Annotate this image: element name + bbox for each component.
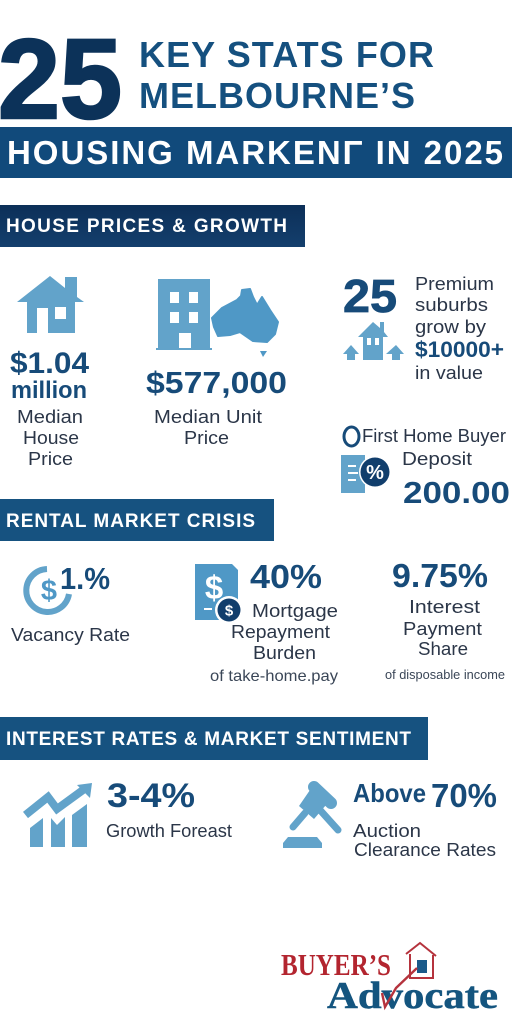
label: auction clearance rates: Auction (353, 821, 421, 841)
stat: mortgage repayment burden (195, 558, 338, 685)
icon: document with percent (341, 455, 391, 493)
value: 1.%: 1.% (60, 561, 110, 596)
label: mortgage repayment burden: Burden (253, 643, 316, 663)
logo: Buyer's Advocate (281, 943, 498, 1017)
value: above 70%: Above (353, 778, 426, 808)
value: $1.04 million: million (11, 377, 87, 404)
section heading: rental market crisis (0, 499, 274, 541)
logo wordmark: Advocate: Advocate (327, 975, 498, 1017)
title banner: HOUSING MARKENΓ IN 2025 (7, 134, 503, 171)
label: premium suburbs grow by: suburbs (415, 295, 488, 315)
label: vacancy rate: Vacancy Rate (11, 625, 130, 645)
label: premium suburbs grow by (415, 274, 504, 383)
label: auction clearance rates: Clearance Rates (354, 840, 496, 860)
icon: apartment building (156, 279, 212, 350)
value: $577,000: $577,000 (146, 365, 287, 400)
icon: map of Australia (212, 289, 278, 342)
title line: Melbourne's: MELBOURNE’S (139, 75, 415, 116)
value: 200.00: 200.00 (403, 475, 510, 510)
icon: document with percent: % (366, 462, 384, 484)
icon: dollar ring: $ (41, 575, 57, 607)
label: growth foreast: Growth Foreast (106, 821, 232, 841)
icon: dollar document (195, 564, 243, 624)
value: $1.04 million: $1.04 (10, 347, 89, 380)
label: interest payment share: Share (418, 639, 468, 659)
icon: house with growth arrows (343, 322, 404, 360)
value: $1.04 million (10, 347, 89, 404)
label: median unit price (154, 407, 262, 448)
label: interest payment share: Payment (403, 619, 482, 639)
stat: first home buyer deposit (341, 426, 510, 510)
label: first home buyer deposit (362, 426, 506, 469)
label: median house price (17, 407, 83, 469)
value: 9.75%: 9.75% (392, 557, 488, 594)
stat: vacancy rate (11, 561, 130, 645)
label: median house price: Median (17, 407, 83, 427)
title number 25: 25 (0, 16, 122, 142)
title line: key stats for: KEY STATS FOR (139, 34, 434, 75)
icon: house (17, 276, 84, 333)
stat: median house price (10, 276, 89, 469)
label: interest payment share: Interest (409, 597, 480, 617)
label: premium suburbs grow by: Premium (415, 274, 494, 294)
label: first home buyer deposit: First Home Buyer (362, 426, 506, 446)
stat: median unit price (146, 279, 287, 448)
value: above 70%: 70% (431, 777, 497, 814)
section heading: rental market crisis: RENTAL MARKET CRISIS (6, 511, 255, 532)
label: premium suburbs grow by: in value (415, 363, 483, 383)
section heading: house prices and growth: HOUSE PRICES & GROWTH (6, 216, 287, 237)
label: median house price: Price (28, 449, 73, 469)
stat: auction clearance rates (283, 777, 497, 860)
icon: auction gavel (283, 787, 338, 848)
label: premium suburbs grow by: $10000+ (415, 337, 504, 362)
stat: premium suburbs (343, 270, 504, 383)
logo check mark (382, 968, 417, 1007)
value: above 70% (353, 777, 497, 814)
label: mortgage repayment burden: Repayment (231, 622, 330, 642)
label: premium suburbs grow by: grow by (415, 317, 486, 337)
label: interest payment share: of disposable income (385, 668, 505, 682)
icon: dollar document: $ (205, 569, 223, 606)
label: median house price: House (23, 428, 79, 448)
section heading: interest rates and market sentiment: INTEREST RATES & MARKET SENTIMENT (6, 729, 411, 750)
logo wordmark: Buyer's: BUYER’S (281, 947, 391, 982)
icon: ring letter O (344, 427, 359, 446)
label: first home buyer deposit: Deposit (402, 449, 472, 469)
logo house icon (406, 943, 436, 978)
label: median unit price: Price (184, 428, 229, 448)
label: median unit price: Median Unit (154, 407, 262, 427)
section heading: house prices and growth (0, 205, 305, 247)
icon: dollar document: $ (225, 602, 234, 620)
value: 3-4%: 3-4% (107, 777, 195, 815)
value: 25: 25 (343, 270, 397, 322)
value: 40%: 40% (250, 558, 322, 595)
label: interest payment share (385, 597, 505, 682)
section heading: interest rates and market sentiment (0, 717, 428, 760)
label: mortgage repayment burden (210, 601, 338, 685)
stat: interest payment share (385, 557, 505, 682)
icon: Tasmania (260, 351, 267, 357)
stat: growth forecast (26, 777, 232, 847)
label: mortgage repayment burden: of take-home.pay (210, 668, 338, 685)
label: auction clearance rates (353, 821, 496, 860)
title (0, 16, 512, 178)
label: mortgage repayment burden: Mortgage (252, 601, 338, 621)
icon: rising bar chart (26, 783, 92, 847)
